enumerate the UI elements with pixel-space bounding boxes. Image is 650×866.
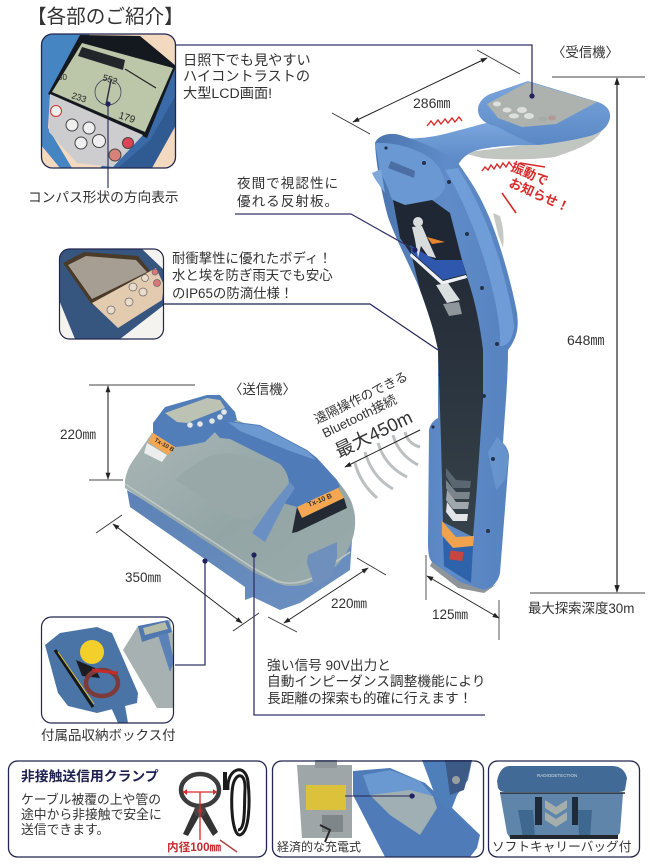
transmitter tray [127,490,352,610]
dimension: 220mm height [60,385,195,480]
dot: lid [251,552,257,558]
label: max depth: 最大探索深度30m [528,601,634,616]
reflector band [410,245,466,280]
receiver callout line [176,45,532,96]
text: output: 強い信号 90V出力と [267,658,391,673]
head display [487,82,597,127]
red vibration marks [427,117,545,213]
text: LCD: ハイコントラストの [183,69,310,85]
label black [292,498,347,533]
orange label right [297,488,344,518]
dimension: 286mm [332,50,520,134]
reflector callout line [235,214,415,250]
receiver dark strip upper [393,200,467,283]
text: IP65: 水と埃を防ぎ雨天でも安心 [172,268,333,283]
title: 【各部のご紹介】 [27,6,184,28]
blue base panel [443,537,473,583]
dimension: 648mm [530,77,645,593]
receiver [372,81,610,593]
caption: accessory box: 付属品収納ボックス付 [41,728,176,743]
orange chevron [442,521,474,548]
clamp inner diameter label: 内径100㎜ [167,840,222,854]
dot: receiver screen [529,93,535,99]
text: IP65: 耐衝撃性に優れたボディ！ [172,250,332,266]
receiver side grip [372,169,385,193]
dimension: 648mm: 648㎜ [567,332,604,348]
receiver rear grey pack [493,213,504,248]
signal waves [355,432,420,498]
panel: LCD photo: 233 [70,90,88,105]
compass callout line [107,104,109,188]
icon: clamp [181,770,249,852]
receiver base [353,768,480,857]
text: LCD: 大型LCD画面! [183,86,272,102]
callout [345,796,415,797]
receiver right highlight [445,168,514,346]
panel: LCD photo: 179 [117,110,137,126]
dimension: 125mm: 125㎜ [432,607,469,622]
receiver handle [400,122,538,165]
left label text: Tx-10 B [153,438,175,454]
dimension: 350mm [96,515,259,631]
panel: LCD photo [41,34,176,168]
keypad [92,268,164,328]
dimension: 220mm height: 220㎜ [60,427,97,442]
text: bluetooth: 最大450m [332,406,416,462]
text: reflector: 夜間で視認性に [237,176,339,191]
keypad [49,94,143,167]
transmitter display [165,398,225,423]
panel: IP65 photo [59,249,164,339]
chevrons [545,800,567,827]
text: vibration notice: お知らせ！ [507,175,572,215]
transmitter [125,395,355,610]
text: output: 長距離の探索も的確に行えます！ [267,691,472,706]
black frame [48,35,176,138]
straps [535,797,578,825]
QR label [436,283,460,303]
side bump [488,437,509,490]
receiver dark strip [412,257,483,537]
dark rim [63,252,151,305]
text: reflector: 優れる反射板。 [237,194,339,209]
label: transmitter: 〈送信機〉 [229,382,296,397]
pod buttons [187,409,227,428]
receiver speaker bump [375,143,445,207]
bag brand: RADIODETECTION [537,773,577,778]
dimension: 286mm: 286㎜ [413,95,450,111]
grey battery lid [370,790,437,835]
speaker grille [388,161,415,178]
red coil [86,670,118,696]
text: output: 自動インピーダンス調整機能により [267,674,485,689]
LCD screen [52,43,173,132]
receiver head underside [463,128,603,159]
receiver body [375,134,518,590]
yellow label [306,785,346,810]
dimension: 350mm: 350㎜ [125,570,162,585]
clamp text: 途中から非接触で安全に [21,807,162,822]
text: bluetooth [312,368,416,462]
blue casing right [100,65,176,168]
lid recess [175,453,295,520]
base grey edge [430,562,497,593]
bag body [500,793,623,838]
transmitter callout lines [175,561,205,665]
text: vibration notice: 振動で [509,159,551,189]
text: bluetooth: 遠隔操作のできる [312,368,410,427]
wet screen [68,256,147,299]
grey transmitter [123,620,174,708]
panel: clamp [8,761,266,857]
handle strap [252,482,295,542]
person logo [412,217,445,258]
dot: reflector [412,247,418,253]
dimension: 125mm [426,555,499,640]
label text: Tx-10 B [307,493,333,509]
clamp heading: 非接触送信用クランプ [21,768,159,784]
yellow disc [80,640,104,664]
connector [322,815,343,832]
dot: tray [202,558,208,564]
panel: rechargeable [272,760,484,857]
ruler [55,650,93,707]
chevrons [446,468,471,521]
side pockets [518,810,592,835]
text: IP65: のIP65の防滴仕様！ [172,286,293,301]
lid lip [125,484,350,583]
bag caption: ソフトキャリーバッグ付 [492,840,632,854]
cable coil [228,770,249,835]
tray [45,627,138,713]
rechargeable caption: 経済的な充電式 [277,839,361,854]
dot: compass [105,101,111,107]
receiver upright [422,760,480,835]
control pod [153,395,237,447]
text: bluetooth: Bluetooth接続 [320,392,399,441]
clamp text: ケーブル被覆の上や管の [21,792,161,807]
black case [76,660,100,678]
clamp text: 送信できます。 [21,822,109,837]
panel: LCD photo: 50 [58,73,67,82]
panel: carry bag [488,760,640,857]
panel: accessory box [41,617,174,723]
body callout line [164,304,438,350]
label: receiver: 〈受信機〉 [552,45,619,60]
dimension: 220mm depth: 220㎜ [331,596,368,611]
dimension: 220mm depth [268,558,386,632]
battery tray [297,765,352,838]
bluetooth arrow [345,430,420,467]
front latch [307,542,337,587]
transmitter lid [125,420,355,586]
orange label left [148,433,175,455]
blue casing left [41,34,90,168]
bag lid [497,766,627,792]
LCD readouts: 552 [101,72,119,87]
handle and pillar [213,421,340,507]
caption: compass: コンパス形状の方向表示 [28,190,179,205]
receiver head [478,81,610,145]
screws [384,146,499,533]
head buttons [493,102,556,122]
text: LCD: 日照下でも見やすい [183,53,311,69]
